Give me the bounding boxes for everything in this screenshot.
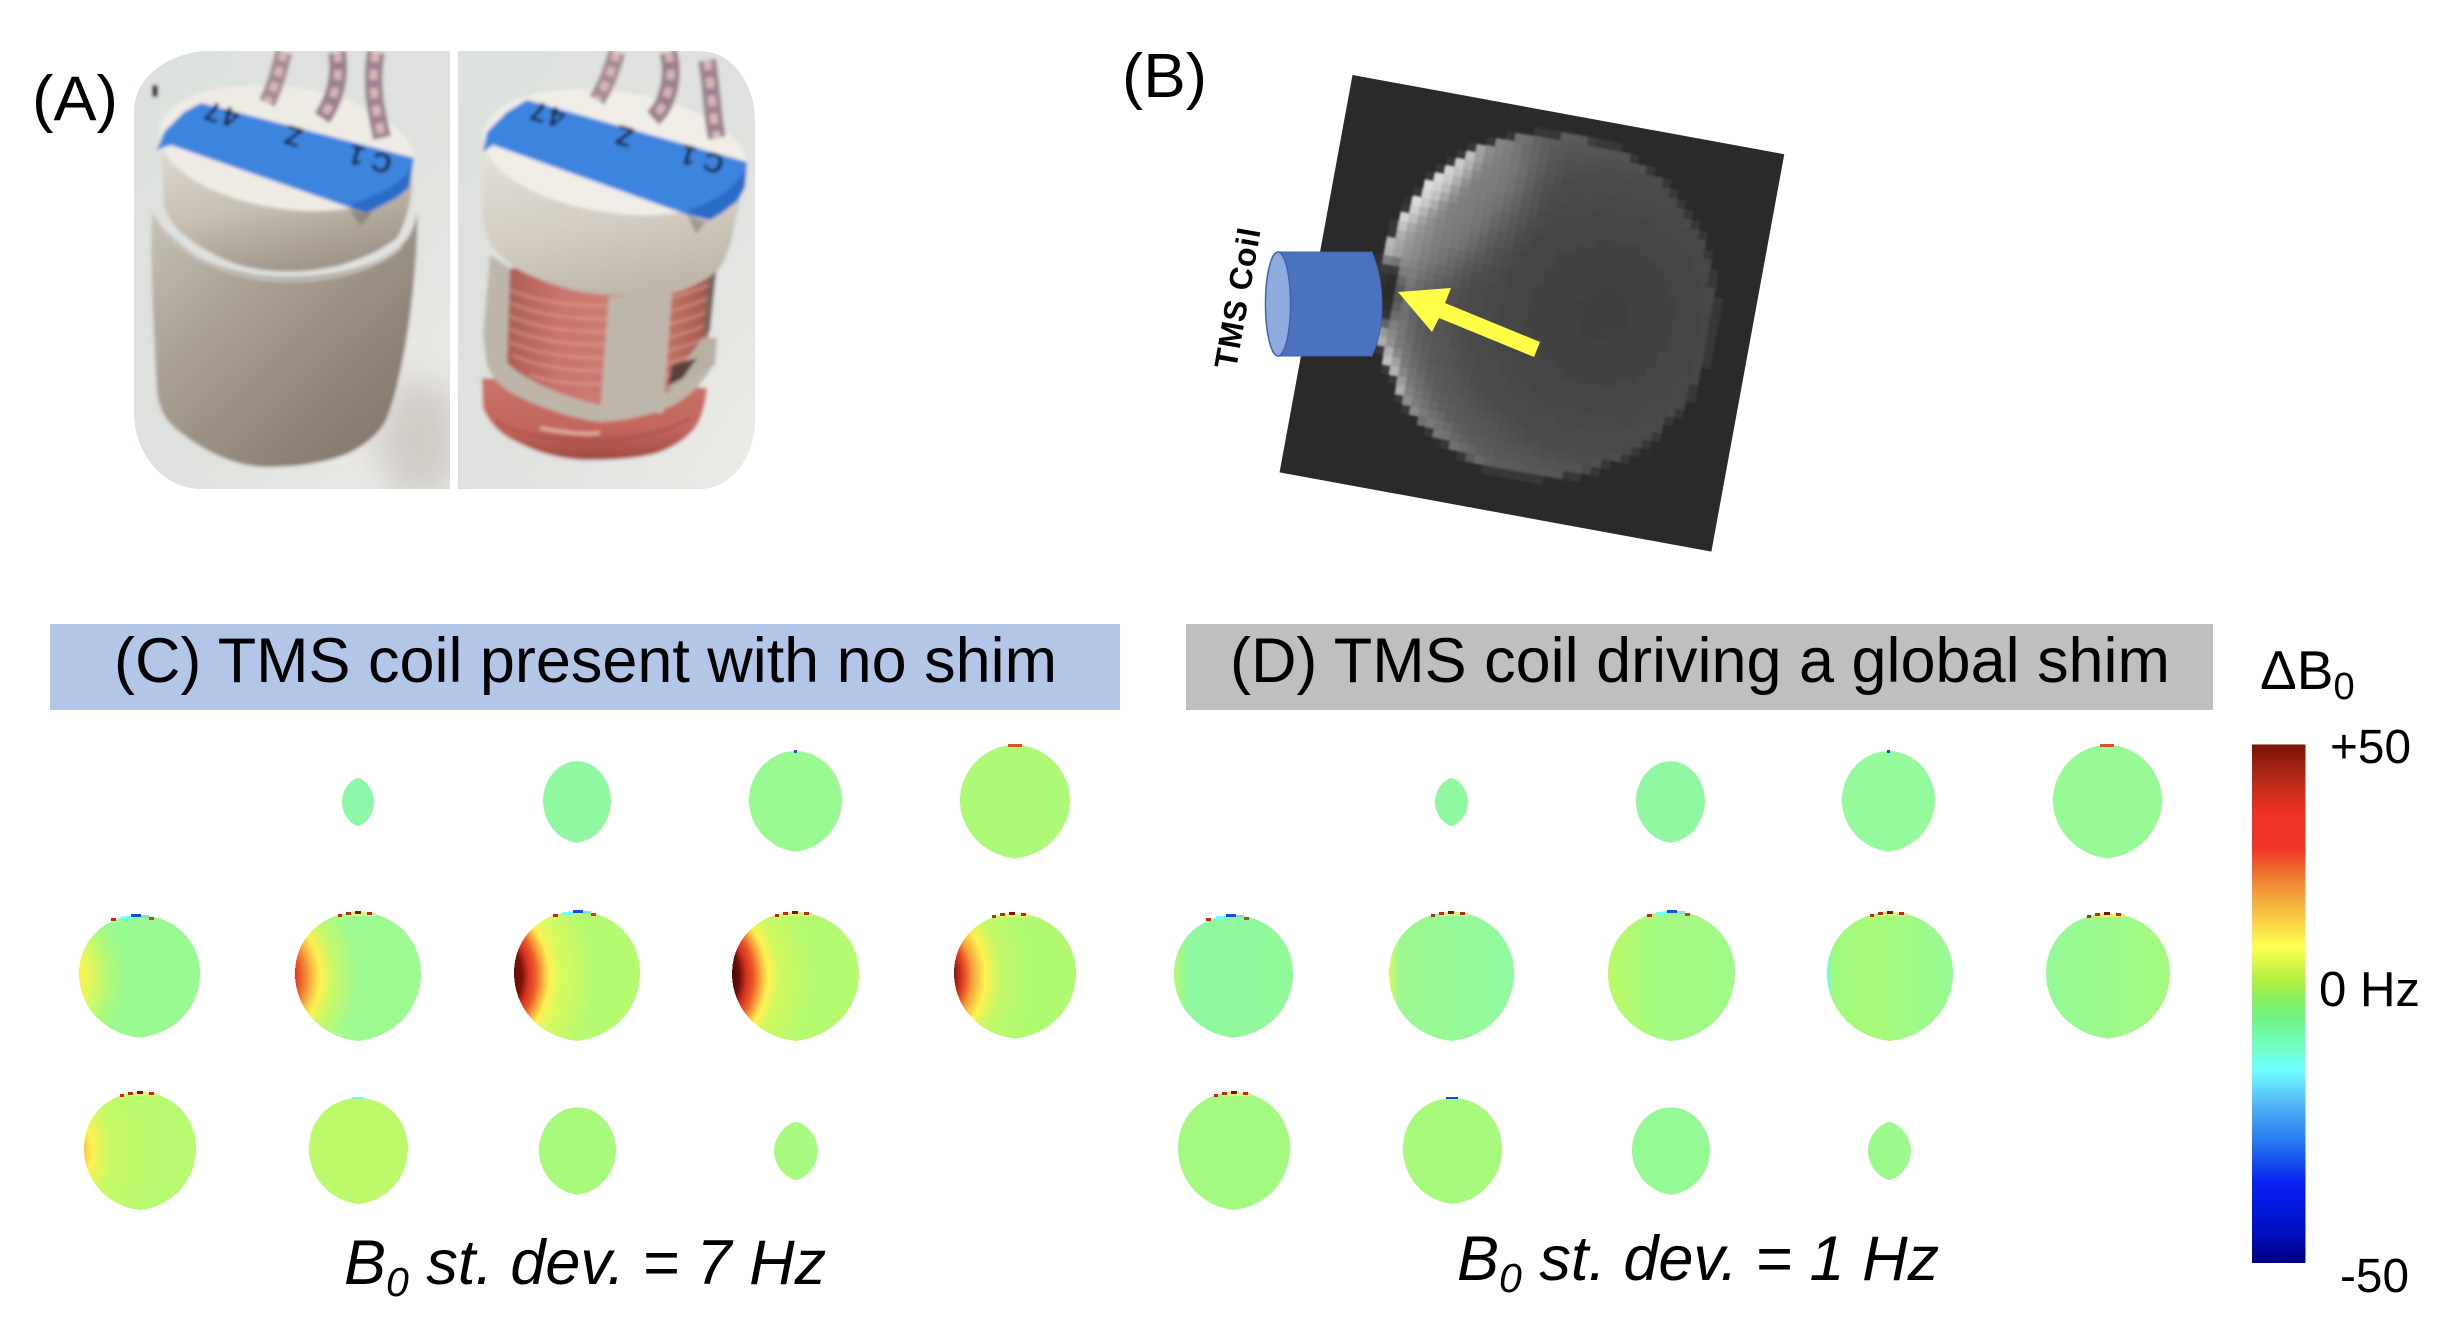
row 3 xyxy=(1178,1091,1911,1210)
colour scale xyxy=(2252,744,2306,1263)
caption: panel C st. dev.: st. dev. = 7 Hz xyxy=(409,1228,826,1298)
tape markings: C1 xyxy=(337,136,396,180)
row 2 xyxy=(79,910,1076,1041)
row 1 xyxy=(342,744,1070,858)
panel B label: (B) xyxy=(1122,42,1207,111)
panel C: field maps without shim xyxy=(79,744,1076,1210)
colour bar legend xyxy=(2252,639,2420,1303)
photo: exposed coil xyxy=(458,51,756,489)
tape markings xyxy=(202,101,393,175)
MR image xyxy=(1280,75,1784,552)
row 2 xyxy=(1174,910,2170,1041)
panel A label: (A) xyxy=(32,64,118,134)
scale label: max: +50 xyxy=(2330,721,2411,774)
panel D: field maps with global shim xyxy=(1174,744,2170,1210)
TMS Coil label: TMS Coil xyxy=(1207,225,1268,371)
panel A: photographs of TMS coil xyxy=(134,40,756,500)
photo: encased coil xyxy=(134,51,460,500)
caption: panel C st. dev.: B xyxy=(344,1228,386,1298)
caption: panel D st. dev.: B xyxy=(1457,1224,1499,1294)
support pillars xyxy=(483,255,510,375)
caption: panel C st. dev.: 0 xyxy=(386,1259,409,1305)
arrow: yellow pointer xyxy=(1398,288,1540,357)
row 3 xyxy=(84,1091,818,1210)
panel B: MR image with TMS coil xyxy=(1207,75,1784,552)
photo: exposed coil: C1 xyxy=(669,136,728,180)
panel C heading: (C) TMS coil present with no shim xyxy=(114,626,1057,696)
photo: exposed coil: 47 xyxy=(524,94,569,134)
tape markings: 47 xyxy=(198,94,243,134)
wires xyxy=(267,52,284,103)
photo: exposed coil: Z xyxy=(612,119,637,153)
icon: TMS coil cylinder xyxy=(1266,252,1382,356)
caption: panel D st. dev.: st. dev. = 1 Hz xyxy=(1522,1224,1939,1294)
lid xyxy=(483,152,747,295)
scale label: min: -50 xyxy=(2340,1250,2409,1303)
scale label: zero: 0 Hz xyxy=(2319,963,2420,1017)
legend title: ΔB xyxy=(2260,639,2333,701)
row 1 xyxy=(1435,744,2162,858)
tape markings: Z xyxy=(281,119,306,153)
copper winding xyxy=(506,268,712,405)
caption: panel D st. dev.: 0 xyxy=(1499,1255,1522,1301)
red wound base xyxy=(482,378,707,460)
legend title: 0 xyxy=(2333,666,2355,708)
pale base ring xyxy=(482,336,712,424)
panel D heading: (D) TMS coil driving a global shim xyxy=(1230,626,2170,696)
